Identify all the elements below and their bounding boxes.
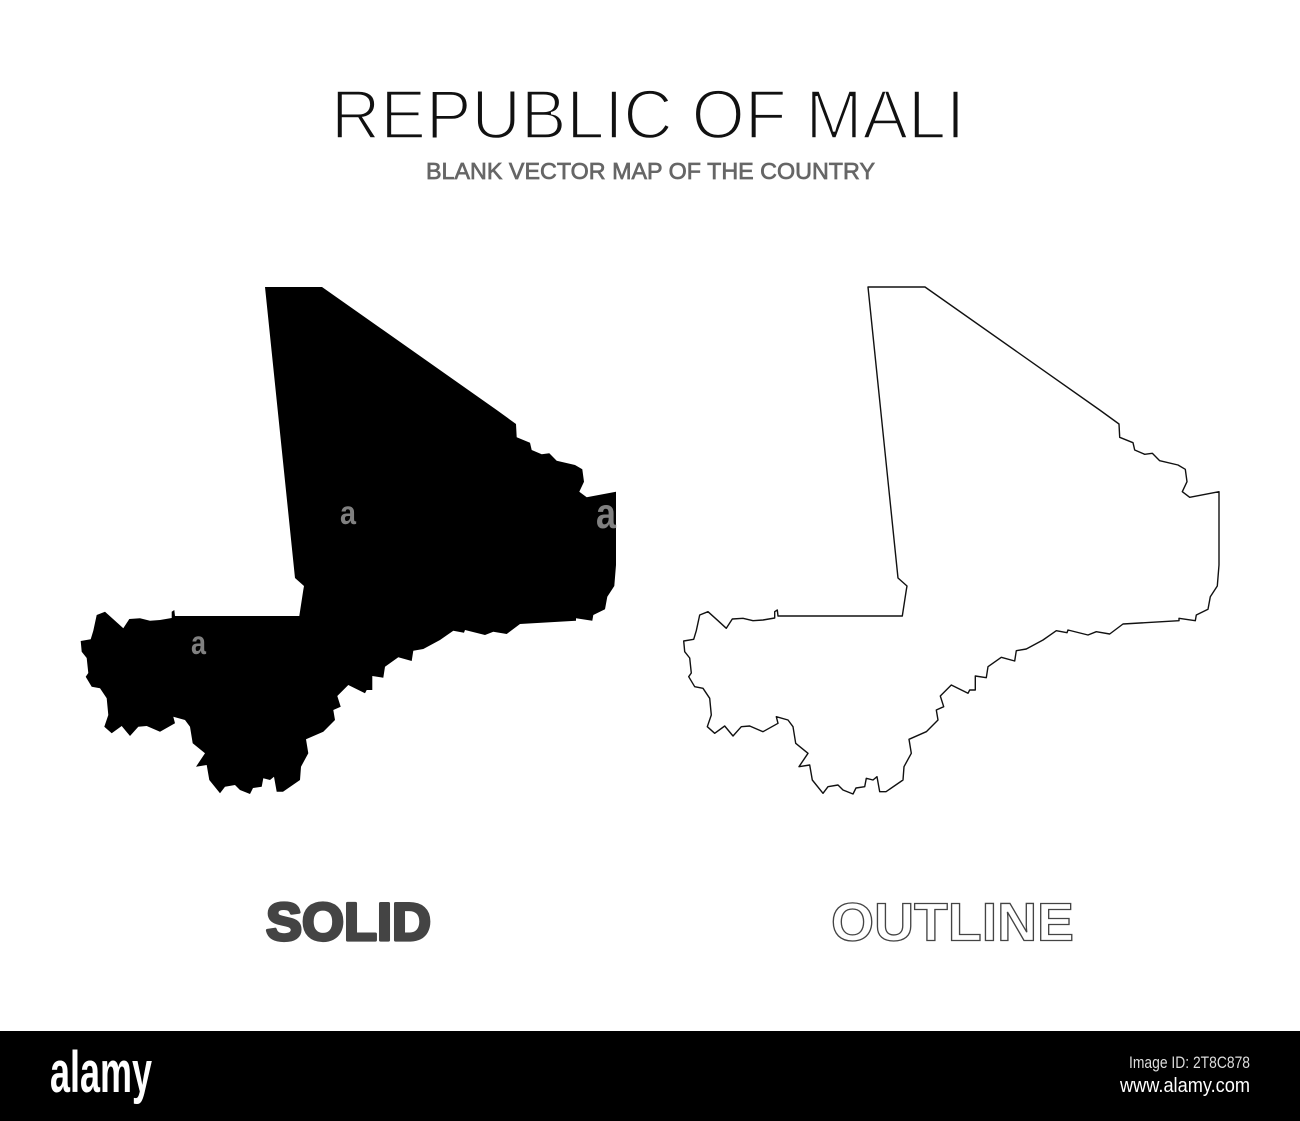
watermark letter: a	[596, 490, 617, 538]
label: solid: SOLID	[266, 893, 431, 952]
subtitle: BLANK VECTOR MAP OF THE COUNTRY	[426, 158, 875, 184]
footer logo: alamy	[50, 1040, 152, 1105]
image id: Image ID: 2T8C878	[1129, 1053, 1250, 1072]
label: outline: OUTLINE	[831, 892, 1074, 952]
title: REPUBLIC OF MALI	[331, 76, 965, 154]
watermark letter: a	[191, 624, 207, 661]
watermark letter: a	[340, 494, 357, 531]
footer bar	[0, 1031, 1300, 1121]
solid map of Mali	[81, 287, 617, 794]
outline map of Mali	[684, 287, 1219, 794]
website: www.alamy.com	[1119, 1075, 1250, 1097]
